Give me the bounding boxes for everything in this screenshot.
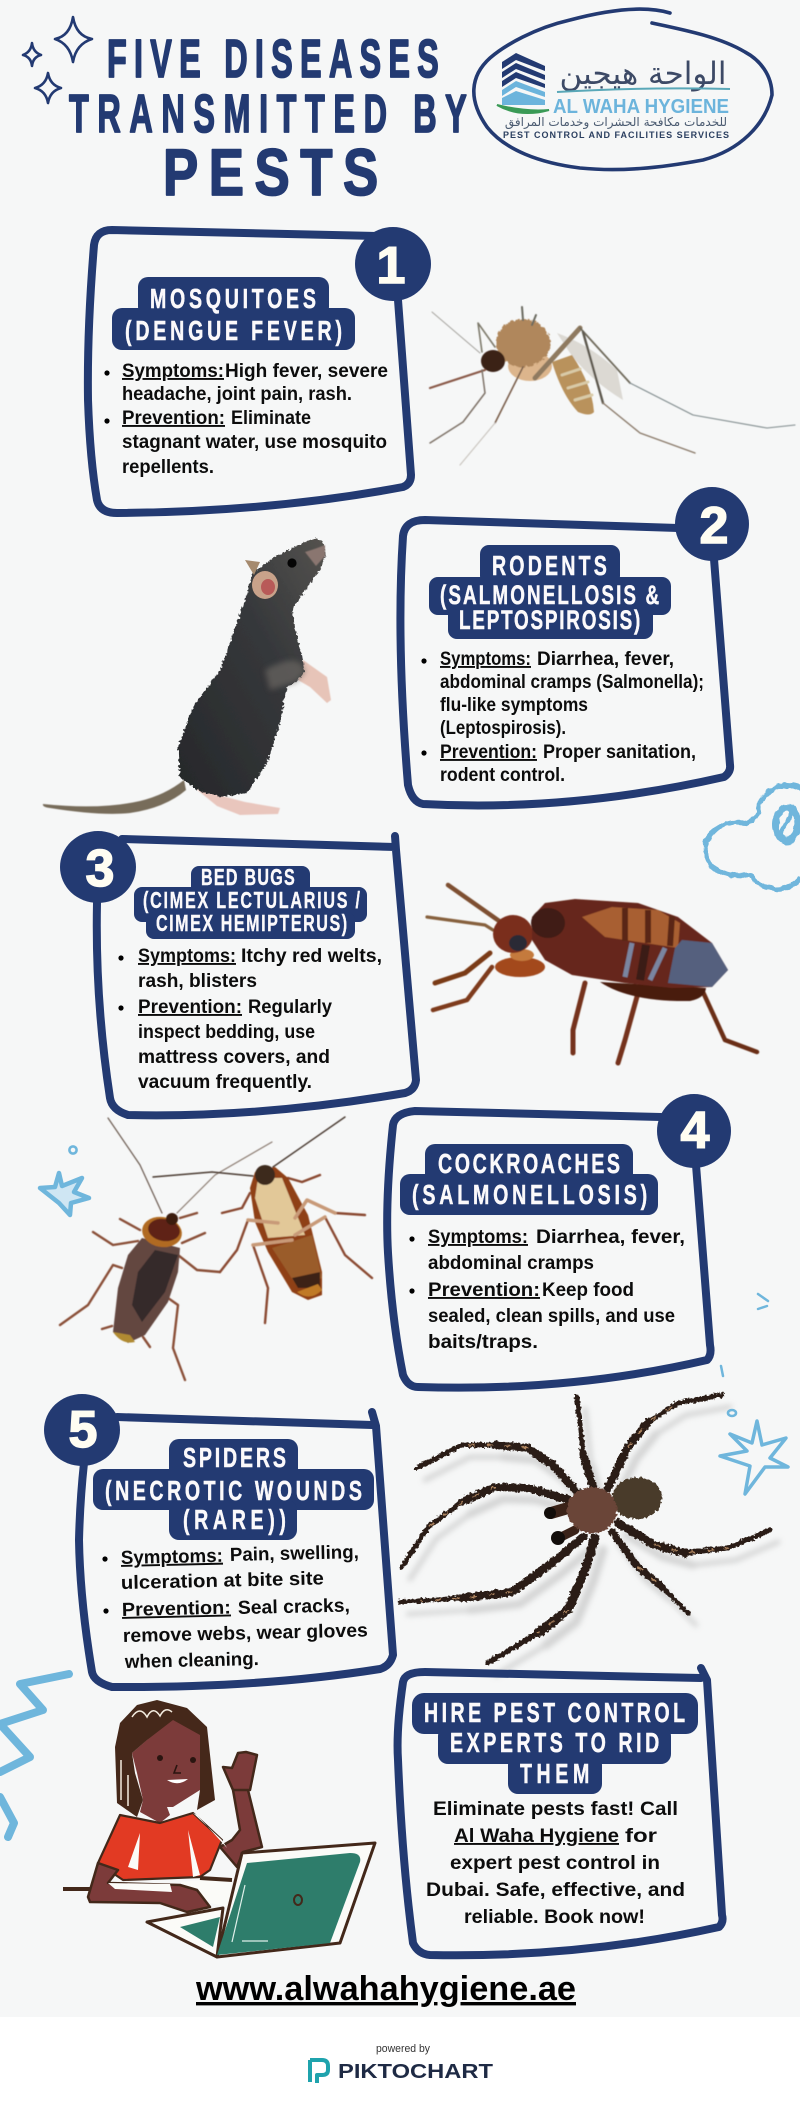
title: PESTS	[163, 135, 378, 209]
decoration: small blue marks	[721, 1294, 768, 1376]
symptoms and prevention: remove webs, wear gloves	[123, 1620, 368, 1647]
image: cockroaches	[60, 1117, 372, 1380]
rat feet	[195, 788, 280, 815]
symptoms and prevention: abdominal cramps	[428, 1253, 594, 1274]
heading: spiders: (NECROTIC WOUNDS	[105, 1476, 362, 1507]
heading: rodents: RODENTS	[492, 551, 607, 582]
number badge 3: 3	[86, 840, 114, 898]
number badge 4	[657, 1094, 731, 1168]
number badge 2	[675, 487, 749, 561]
symptoms and prevention: vacuum frequently.	[138, 1072, 312, 1093]
image: spider	[400, 1395, 778, 1675]
logo ring	[474, 9, 772, 170]
call to action text: Eliminate pests fast! Call	[433, 1799, 678, 1820]
heading: bed bugs: CIMEX HEMIPTERUS)	[156, 911, 347, 937]
heading: cockroaches: (SALMONELLOSIS)	[412, 1180, 647, 1211]
image: rat	[43, 538, 331, 815]
logo: Al Waha Hygiene: PEST CONTROL AND FACILITIES SERVICES	[503, 130, 729, 140]
decoration: blue cloud doodle	[705, 785, 800, 889]
panel: call to action	[398, 1668, 723, 1955]
symptoms and prevention: Diarrhea, fever,	[536, 1227, 685, 1248]
rat hand	[298, 660, 331, 703]
symptoms and prevention: flu-like symptoms	[440, 695, 588, 716]
symptoms and prevention: (Leptospirosis).	[440, 718, 566, 739]
decoration: blue squiggle	[0, 1674, 69, 1837]
rat tail	[43, 780, 186, 814]
symptoms and prevention: High fever, severe	[225, 361, 388, 382]
laptop base	[147, 1908, 223, 1957]
symptoms and prevention: stagnant water, use mosquito	[122, 432, 387, 453]
resting arm	[88, 1863, 210, 1912]
symptoms and prevention: when cleaning.	[124, 1649, 259, 1673]
shirt	[98, 1813, 222, 1880]
symptoms and prevention: rodent control.	[440, 765, 565, 786]
heading: hire pest control: EXPERTS TO RID	[450, 1728, 659, 1759]
call to action text: Al Waha Hygiene	[454, 1826, 619, 1847]
blue rear	[668, 940, 728, 987]
laptop screen	[217, 1843, 375, 1957]
symptoms and prevention: Symptoms:	[440, 649, 531, 670]
heading: hire pest control: HIRE PEST CONTROL	[424, 1698, 685, 1729]
symptoms and prevention: Prevention:	[138, 997, 242, 1018]
number badge 1	[355, 227, 431, 301]
number badge 2: 2	[700, 497, 728, 555]
symptoms and prevention	[409, 1227, 685, 1353]
number badge 5: 5	[69, 1401, 97, 1459]
call to action text: for	[625, 1826, 658, 1847]
symptoms and prevention: Itchy red welts,	[241, 946, 382, 967]
logo: Al Waha Hygiene: للخدمات مكافحة الحشرات وخدمات المرافق	[505, 115, 727, 130]
panel 4: cockroaches	[387, 1094, 731, 1388]
image: bed bug	[427, 885, 757, 1063]
symptoms and prevention: Symptoms:	[122, 361, 224, 382]
panel 3: bed bugs	[60, 831, 416, 1115]
symptoms and prevention: mattress covers, and	[138, 1047, 330, 1068]
heading: spiders: SPIDERS	[183, 1443, 286, 1474]
hair	[115, 1700, 215, 1817]
white table	[180, 1877, 233, 1907]
panel 2: rodents	[400, 487, 749, 805]
decoration: blue star right	[720, 1410, 788, 1494]
symptoms and prevention: Seal cracks,	[238, 1595, 350, 1619]
call to action text	[426, 1799, 685, 1928]
symptoms and prevention: Symptoms:	[428, 1227, 528, 1248]
heading: rodents	[429, 545, 671, 639]
icon: piktochart logo	[310, 2060, 328, 2083]
symptoms and prevention: Symptoms:	[138, 946, 236, 967]
heading: rodents: LEPTOSPIROSIS)	[459, 605, 640, 635]
heading: hire pest control: THEM	[520, 1759, 589, 1790]
heading: mosquitoes	[112, 277, 355, 350]
heading: spiders: (RARE))	[183, 1505, 286, 1536]
number badge 1: 1	[377, 237, 405, 295]
card outline	[88, 230, 411, 513]
rat body	[178, 538, 326, 797]
title: TRANSMITTED BY	[69, 85, 467, 144]
symptoms and prevention: Regularly	[248, 997, 332, 1018]
call to action text: reliable. Book now!	[464, 1907, 645, 1928]
heading: bed bugs	[134, 865, 367, 939]
symptoms and prevention: Pain, swelling,	[230, 1542, 359, 1566]
underside	[600, 982, 706, 1001]
symptoms and prevention: Prevention:	[122, 408, 225, 429]
carapace	[532, 899, 728, 988]
logo: Al Waha Hygiene	[474, 9, 772, 170]
symptoms and prevention: Prevention:	[428, 1280, 540, 1301]
heading: spiders	[93, 1439, 374, 1540]
number badge 5	[44, 1394, 120, 1466]
heading: bed bugs: BED BUGS	[201, 865, 295, 891]
symptoms and prevention	[421, 649, 704, 786]
left cockroach	[60, 1118, 272, 1380]
raised arm	[220, 1752, 262, 1867]
heading: rodents: (SALMONELLOSIS &	[440, 580, 659, 610]
panel 1: mosquitoes	[88, 227, 431, 513]
heading: cockroaches: COCKROACHES	[438, 1149, 620, 1180]
footer: powered by	[376, 2043, 430, 2055]
symptoms and prevention: Diarrhea, fever,	[537, 649, 674, 670]
symptoms and prevention: sealed, clean spills, and use	[428, 1306, 675, 1327]
call to action text: Dubai. Safe, effective, and	[426, 1880, 685, 1901]
image: mosquito	[430, 307, 795, 465]
website url: www.alwahahygiene.ae	[195, 1970, 576, 2008]
symptoms and prevention: baits/traps.	[428, 1332, 538, 1353]
number badge 4: 4	[681, 1102, 710, 1160]
symptoms and prevention: abdominal cramps (Salmonella);	[440, 672, 704, 693]
face and neck	[132, 1717, 203, 1823]
footer: PIKTOCHART	[338, 2061, 493, 2083]
symptoms and prevention	[102, 1542, 368, 1673]
symptoms and prevention: rash, blisters	[138, 971, 257, 992]
heading: bed bugs: (CIMEX LECTULARIUS /	[143, 888, 360, 914]
symptoms and prevention: Proper sanitation,	[543, 742, 696, 763]
symptoms and prevention	[118, 946, 382, 1093]
logo: Al Waha Hygiene: AL WAHA HYGIENE	[553, 96, 729, 118]
head	[493, 915, 533, 953]
heading: hire pest control	[412, 1693, 698, 1794]
title: FIVE DISEASES	[107, 30, 439, 89]
spider shadow	[408, 1407, 778, 1675]
spider legs	[400, 1395, 770, 1663]
symptoms and prevention: Keep food	[542, 1280, 634, 1301]
heading: cockroaches	[400, 1144, 658, 1215]
panel 5: spiders	[44, 1394, 393, 1687]
rat ears	[245, 560, 260, 575]
symptoms and prevention: Prevention:	[440, 742, 537, 763]
symptoms and prevention: repellents.	[122, 457, 214, 478]
logo: Al Waha Hygiene: الواحة هيجين	[560, 56, 726, 92]
right cockroach	[153, 1117, 372, 1323]
illustration: girl with laptop	[63, 1700, 375, 1957]
heading: mosquitoes: (DENGUE FEVER)	[125, 316, 342, 347]
title	[69, 30, 467, 209]
icon: title sparkles	[23, 17, 92, 103]
symptoms and prevention: Prevention:	[122, 1598, 231, 1621]
symptoms and prevention: inspect bedding, use	[138, 1022, 315, 1043]
legs and antennae	[427, 885, 757, 1063]
symptoms and prevention: Symptoms:	[121, 1546, 223, 1569]
tan wing band	[582, 907, 680, 948]
symptoms and prevention	[104, 361, 388, 478]
decoration: blue star left	[40, 1146, 89, 1215]
symptoms and prevention: Eliminate	[231, 408, 311, 429]
heading: mosquitoes: MOSQUITOES	[150, 284, 316, 315]
footer	[0, 2017, 800, 2104]
number badge 3	[60, 831, 136, 903]
symptoms and prevention: headache, joint pain, rash.	[122, 384, 352, 405]
call to action text: expert pest control in	[450, 1853, 660, 1874]
symptoms and prevention: ulceration at bite site	[121, 1568, 324, 1594]
logo building icon	[497, 53, 549, 113]
